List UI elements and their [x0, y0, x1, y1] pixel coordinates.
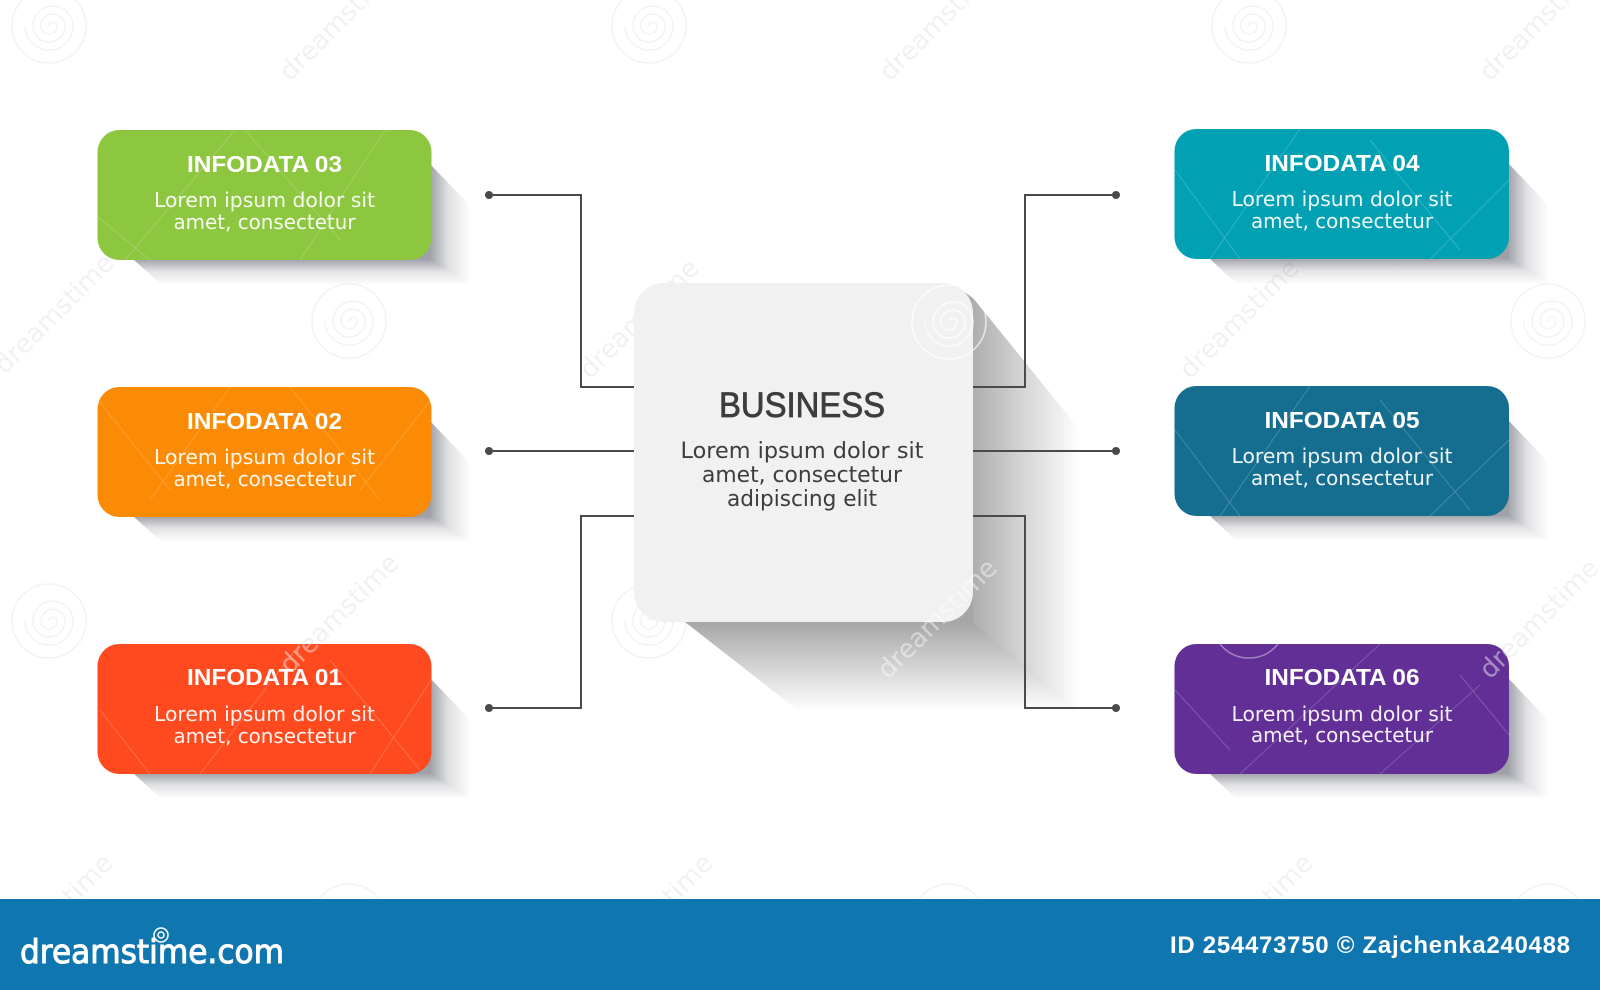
- connector lines right: [973, 191, 1120, 712]
- center card long shadow: [685, 291, 1080, 712]
- foreground watermark on cards: dreamstime: [274, 548, 405, 680]
- panel: infodata 01: [98, 644, 476, 802]
- panel: infodata 06: amet, consectetur: [1251, 723, 1434, 747]
- background watermark: dreamstime: [574, 253, 705, 385]
- panel: infodata 04: [1174, 129, 1554, 287]
- panel: infodata 06: INFODATA 06: [1264, 664, 1420, 690]
- credit text: ID 254473750 © Zajchenka240488: [1170, 932, 1570, 959]
- center body text: amet, consectetur: [702, 463, 903, 488]
- panel: infodata 02: INFODATA 02: [187, 408, 342, 434]
- icon: spiral: [154, 928, 168, 942]
- panel: infodata 04: amet, consectetur: [1251, 209, 1434, 233]
- panel: infodata 05: INFODATA 05: [1264, 407, 1420, 433]
- panel: infodata 06: Lorem ipsum dolor sit: [1232, 702, 1453, 726]
- panel: infodata 01: INFODATA 01: [187, 664, 342, 690]
- panel: infodata 04: Lorem ipsum dolor sit: [1232, 187, 1453, 211]
- panel: infodata 01: amet, consectetur: [174, 724, 356, 748]
- panel: center business card: [634, 283, 973, 622]
- panel: infodata 05: Lorem ipsum dolor sit: [1232, 444, 1453, 468]
- panel: infodata 05: amet, consectetur: [1251, 466, 1434, 490]
- panel: infodata 06: [1174, 644, 1554, 802]
- logo: dreamstime.com: dreamstime.com: [20, 932, 284, 971]
- panel: infodata 02: amet, consectetur: [174, 467, 356, 491]
- background watermark: dreamstime: [274, 548, 405, 680]
- panel: infodata 03: [98, 130, 476, 288]
- panel: infodata 02: Lorem ipsum dolor sit: [154, 445, 375, 469]
- center body text: [680, 439, 924, 512]
- foreground watermark on cards: dreamstime: [872, 553, 1003, 685]
- panel: infodata 04: INFODATA 04: [1264, 150, 1420, 176]
- panel: infodata 02: [98, 387, 476, 545]
- center heading: BUSINESS: [719, 386, 885, 425]
- background watermark: dreamstime: [1188, 848, 1319, 980]
- panel: infodata 03: amet, consectetur: [174, 210, 356, 234]
- center body text: Lorem ipsum dolor sit: [680, 439, 924, 464]
- panel: infodata 05: [1174, 386, 1554, 544]
- panel: infodata 03: Lorem ipsum dolor sit: [154, 188, 375, 212]
- background watermark: dreamstime: [1174, 253, 1305, 385]
- panel: infodata 03: INFODATA 03: [187, 151, 342, 177]
- background watermark: dreamstime: [588, 848, 719, 980]
- center body text: adipiscing elit: [727, 487, 877, 512]
- panel: infodata 01: Lorem ipsum dolor sit: [154, 702, 375, 726]
- connector lines left: [485, 191, 634, 712]
- foreground watermark on cards: [98, 129, 1600, 774]
- footer bar: [0, 899, 1600, 990]
